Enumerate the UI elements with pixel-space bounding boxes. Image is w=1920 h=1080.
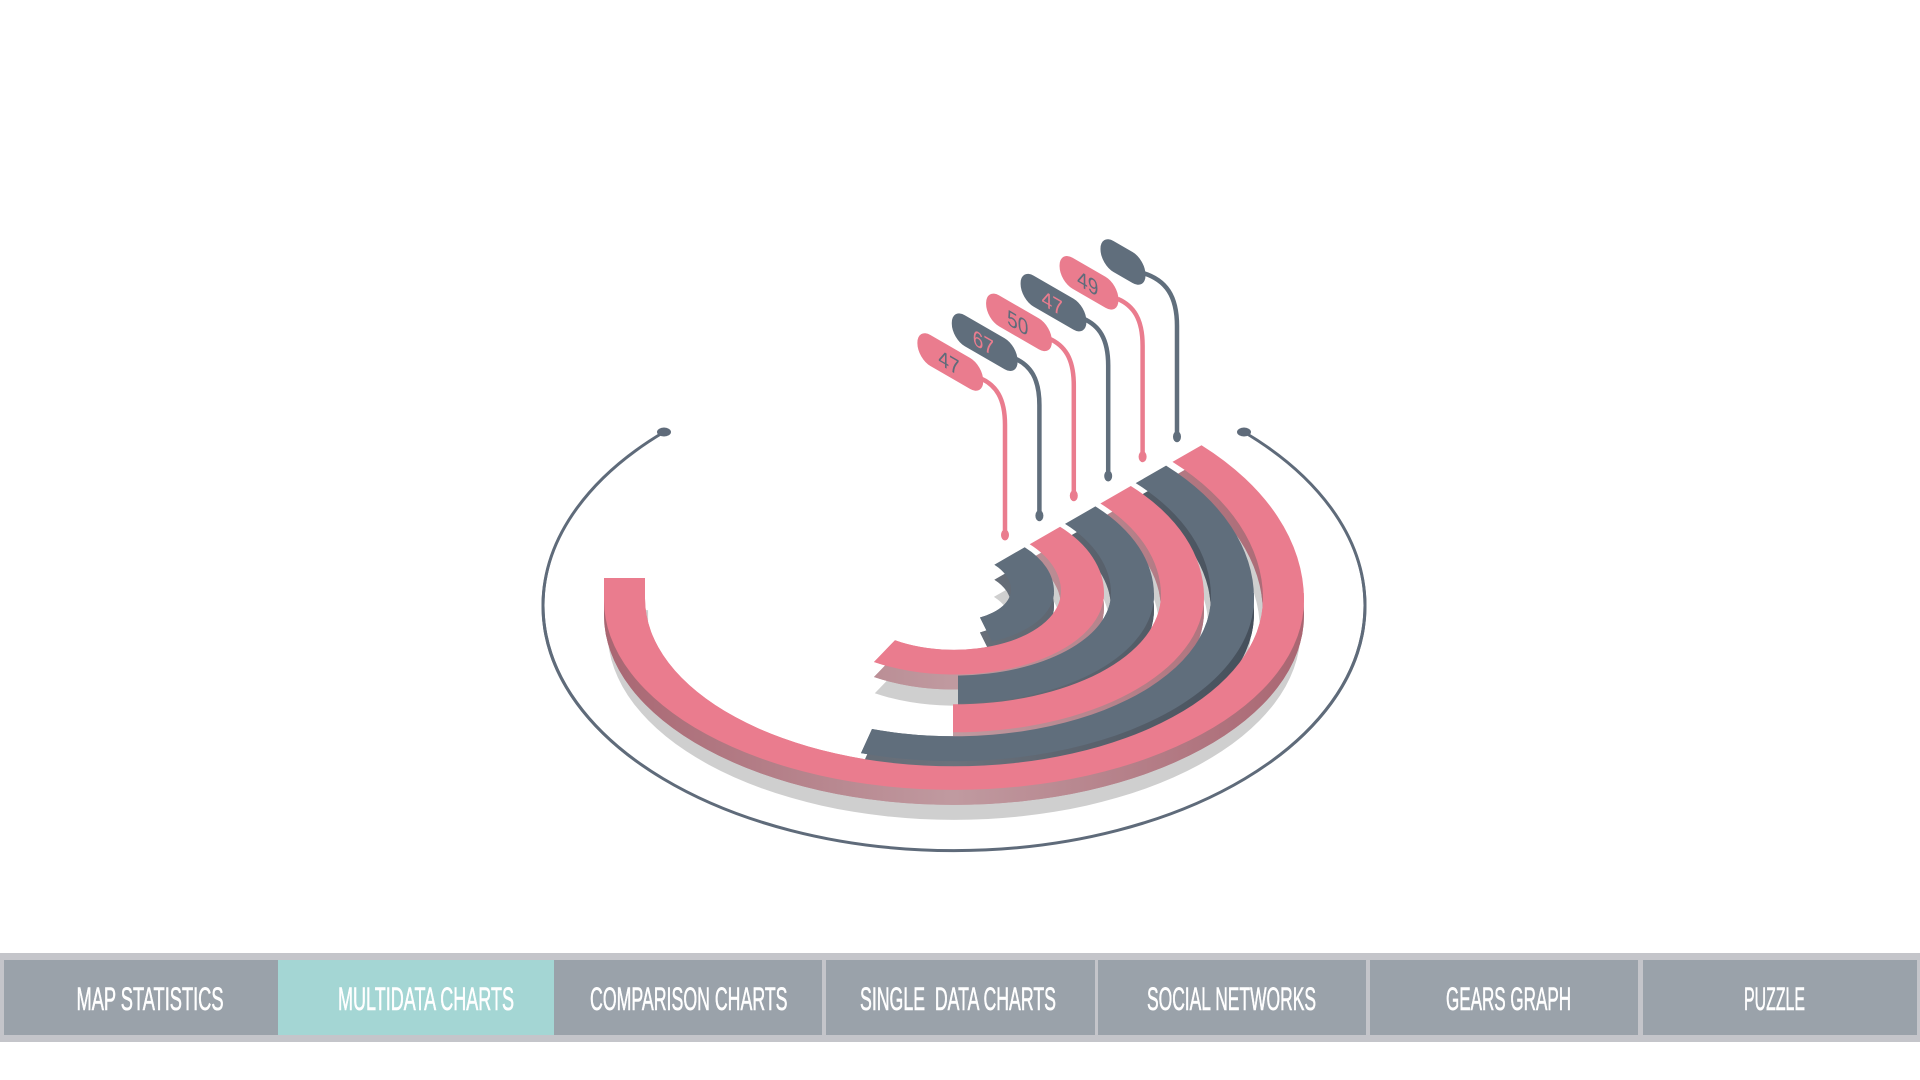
label 3: 50 pink [986,288,1078,501]
tab: single data charts: SINGLE DATA CHARTS [860,981,1056,1017]
label 5: 49 pink: 49 [1077,265,1098,302]
label 2: 67 dark: 67 [973,324,994,361]
outer orbit line [542,428,1366,851]
front half of rings, inner to outer [604,593,1304,805]
tab: social networks: SOCIAL NETWORKS [1147,981,1316,1017]
tab: gears graph [1370,960,1638,1035]
label 4: 47 dark [1021,268,1112,482]
label 6: dark, unnumbered [1100,234,1181,442]
label 2: 67 dark [952,308,1043,521]
tab: puzzle [1643,960,1917,1035]
isometric ring chart [604,445,1304,820]
tab: comparison charts: COMPARISON CHARTS [590,981,788,1017]
label 1: 47 pink [917,328,1009,540]
tab: multidata charts (active) [278,960,554,1035]
tab: puzzle: PUZZLE [1744,981,1805,1017]
tab: gears graph: GEARS GRAPH [1446,981,1571,1017]
tab: comparison charts [554,960,822,1035]
navigation bar [0,953,1920,1042]
back half of rings, outer to inner [604,445,1304,805]
tab: map statistics: MAP STATISTICS [76,981,224,1017]
tab: multidata charts (active): MULTIDATA CHARTS [338,981,514,1017]
tab: map statistics [4,960,278,1035]
tab: social networks [1098,960,1366,1035]
ground shadows [608,479,1300,820]
label 3: 50 pink: 50 [1007,304,1028,342]
label 1: 47 pink: 47 [938,344,960,381]
tab: single data charts [826,960,1095,1035]
label 5: 49 pink [1060,250,1147,462]
label 4: 47 dark: 47 [1042,284,1063,322]
